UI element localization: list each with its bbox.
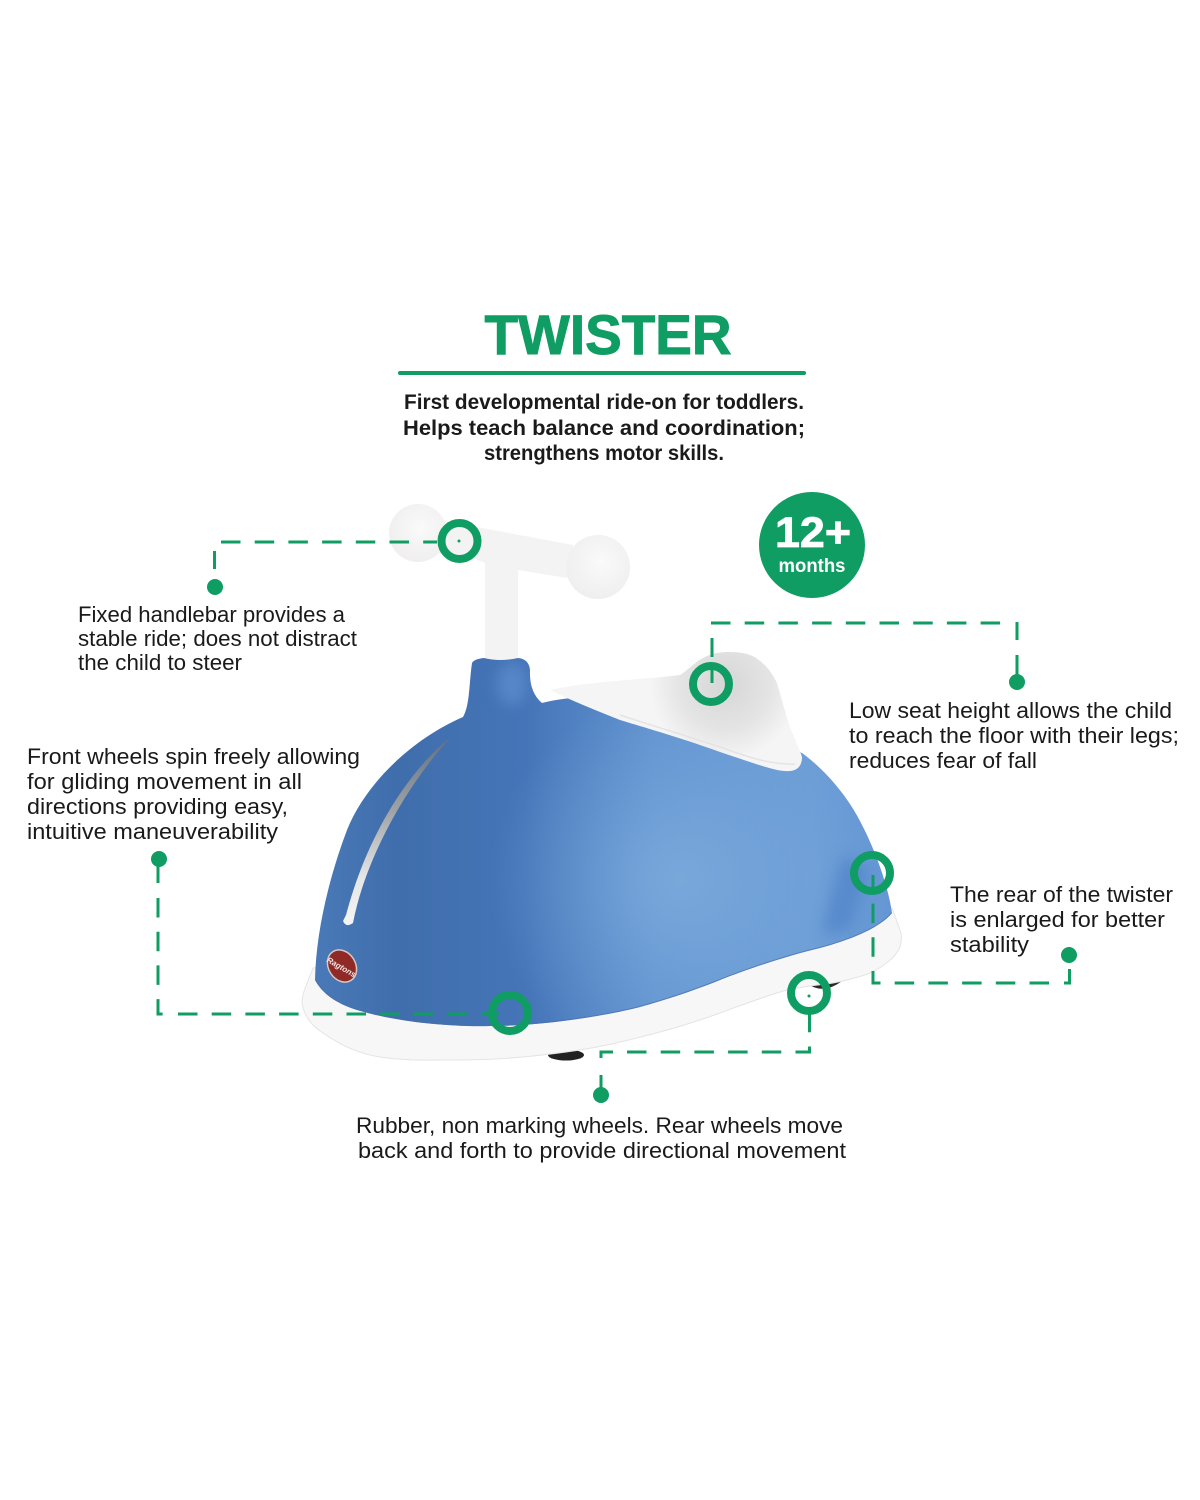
callout: front wheels: intuitive maneuverability	[27, 819, 279, 844]
callout: front wheels: directions providing easy,	[27, 794, 288, 819]
age badge: months	[778, 556, 846, 577]
callout: rubber wheels	[356, 975, 847, 1163]
title underline	[398, 371, 806, 375]
icon: rear wheel	[805, 981, 842, 989]
handlebar stem and bar	[425, 521, 573, 662]
callout: handlebar	[78, 523, 478, 675]
seat	[550, 652, 802, 771]
callout: low seat: reduces fear of fall	[849, 748, 1037, 773]
callout: rubber wheels: Rubber, non marking wheels. Rear wheels move	[356, 1113, 843, 1138]
callout: handlebar: Fixed handlebar provides a	[78, 602, 345, 627]
handlebar left ball	[389, 504, 447, 562]
age badge: 12+	[775, 509, 851, 557]
callout: enlarged rear: The rear of the twister	[950, 882, 1174, 907]
product illustration: twister ride-on	[300, 504, 910, 1060]
age badge	[759, 492, 865, 598]
callout: enlarged rear: stability	[950, 932, 1030, 957]
white base	[302, 908, 902, 1060]
intro text: strengthens motor skills.	[484, 442, 724, 465]
callout: handlebar: stable ride; does not distract	[78, 626, 358, 651]
icon: front wheel	[548, 1050, 584, 1060]
handle slot stripe	[343, 735, 453, 925]
callout: low seat	[693, 622, 1179, 773]
intro text: Helps teach balance and coordination;	[403, 417, 805, 440]
callout: low seat: Low seat height allows the child	[849, 698, 1172, 723]
callout: enlarged rear	[854, 855, 1174, 983]
blue body	[315, 658, 892, 1026]
callout: front wheels: for gliding movement in all	[27, 769, 302, 794]
neck highlight	[497, 662, 527, 706]
callout: rubber wheels: back and forth to provide directional movement	[358, 1138, 847, 1163]
intro text: First developmental ride-on for toddlers.	[404, 391, 804, 414]
callout: handlebar: the child to steer	[78, 650, 243, 675]
callout: front wheels	[27, 744, 528, 1031]
handlebar right ball	[566, 535, 630, 599]
icon: brand badge	[322, 944, 362, 988]
intro text	[403, 391, 805, 465]
callout: enlarged rear: is enlarged for better	[950, 907, 1166, 932]
callout: low seat: to reach the floor with their legs;	[849, 723, 1179, 748]
body lower edge shadow	[315, 913, 892, 1026]
callout: front wheels: Front wheels spin freely allowing	[27, 744, 360, 769]
icon: brand badge: Ragtons	[325, 955, 358, 979]
title: TWISTER	[484, 303, 732, 366]
seat lip	[620, 715, 795, 764]
rear bump shading	[822, 859, 866, 935]
